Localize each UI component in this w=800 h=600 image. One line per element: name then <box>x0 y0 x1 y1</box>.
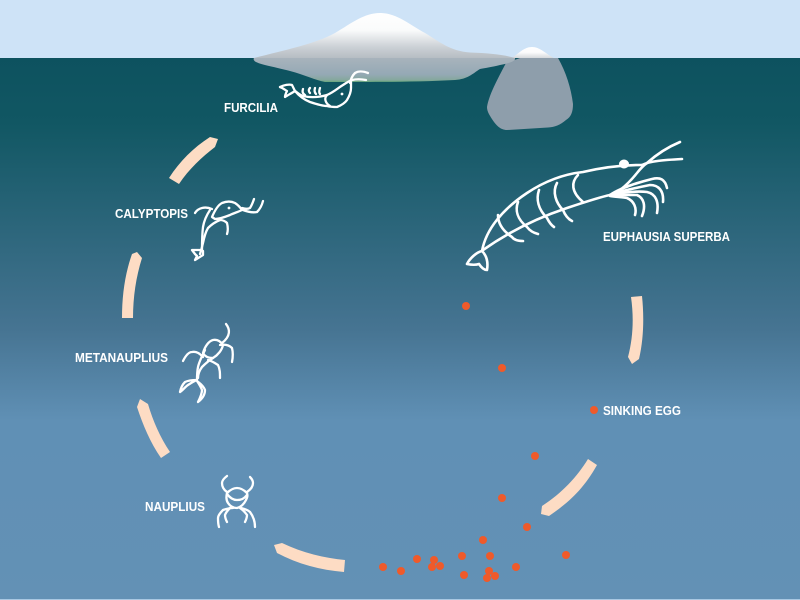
icon: metanauplius <box>180 324 233 402</box>
small iceberg <box>487 47 573 130</box>
label: euphausia superba: EUPHAUSIA SUPERBA <box>603 229 731 244</box>
icon: calyptopis <box>192 199 263 260</box>
eggs <box>379 302 598 582</box>
cycle arrow: calyptopis to furcilia <box>169 137 218 184</box>
sky <box>0 0 800 59</box>
cycle arrow: hatching to nauplius <box>274 543 345 572</box>
label: sinking egg: SINKING EGG <box>603 403 681 418</box>
label: metanauplius: METANAUPLIUS <box>75 350 168 365</box>
large iceberg <box>254 13 515 82</box>
icon: nauplius <box>218 476 255 527</box>
calyptopis eye <box>228 207 230 209</box>
icon: furcilia <box>280 72 368 107</box>
cycle arrow: egg sinking to depth <box>628 296 643 364</box>
label: calyptopis: CALYPTOPIS <box>115 206 188 221</box>
cycle arrow: metanauplius to calyptopis <box>122 252 142 318</box>
label: furcilia: FURCILIA <box>224 100 279 115</box>
icon: adult krill <box>467 142 682 270</box>
krill eye <box>619 160 629 168</box>
cycle arrow: toward sea floor <box>541 459 597 516</box>
seabed edge <box>0 599 800 600</box>
cycle arrow: nauplius to metanauplius <box>137 399 170 458</box>
furcilia eye <box>341 93 343 95</box>
label: nauplius: NAUPLIUS <box>145 499 205 514</box>
